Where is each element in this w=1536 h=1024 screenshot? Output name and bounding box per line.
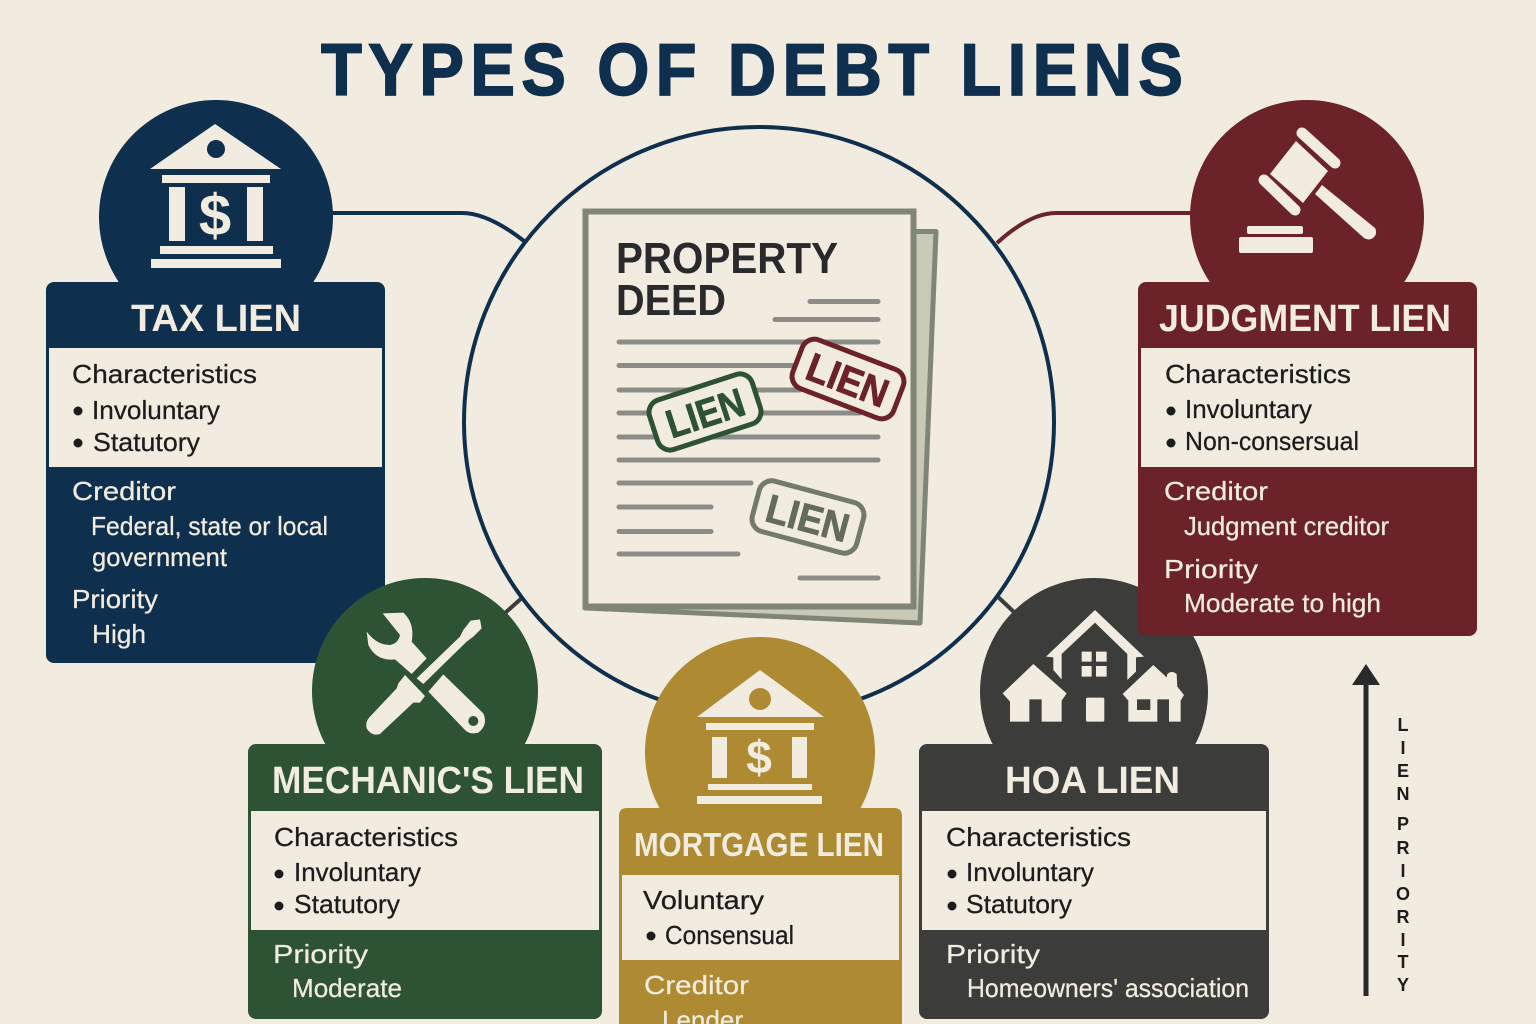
priority: Priority — [946, 939, 1040, 969]
characteristics box: Voluntary — [643, 885, 764, 915]
creditor: government — [92, 542, 228, 572]
panel: mechanic's lien — [248, 578, 602, 1019]
characteristics box — [49, 348, 382, 467]
card heading: JUDGMENT LIEN — [1159, 298, 1451, 340]
label: lien priority: P — [1397, 814, 1409, 834]
icon: bank with dollar sign: $ — [746, 731, 772, 783]
priority: Priority — [72, 584, 158, 614]
characteristics box: Involuntary — [966, 857, 1094, 887]
label: lien priority: T — [1398, 952, 1408, 972]
connector: mechanic's lien to deed — [505, 597, 523, 613]
characteristics box: Characteristics — [72, 359, 257, 389]
card heading: HOA LIEN — [1005, 760, 1180, 802]
card heading: TAX LIEN — [131, 298, 301, 340]
characteristics box — [622, 875, 899, 960]
card — [46, 282, 385, 663]
characteristics box: Involuntary — [1185, 394, 1312, 424]
icon: bank with dollar sign: $ — [199, 183, 231, 248]
deed heading: PROPERTY — [616, 234, 838, 283]
card — [619, 808, 902, 1024]
priority: Priority — [1164, 554, 1258, 584]
panel: judgment lien — [1138, 100, 1477, 636]
label: lien priority: I — [1400, 738, 1406, 758]
text lines — [619, 302, 878, 578]
stamp: green lien: LIEN — [661, 381, 750, 447]
label: lien priority: E — [1397, 761, 1409, 781]
icon: bank with dollar sign — [99, 100, 333, 334]
connector: HOA lien to deed — [997, 596, 1015, 613]
characteristics box: Statutory — [294, 889, 400, 919]
characteristics box: Statutory — [93, 427, 200, 457]
label: lien priority: I — [1400, 930, 1406, 950]
characteristics box — [1141, 348, 1474, 467]
card — [1138, 282, 1477, 636]
priority — [273, 939, 402, 1003]
characteristics box: Non-consersual — [1185, 426, 1359, 456]
title: TYPES OF DEBT LIENS — [321, 29, 1183, 111]
label: lien priority: O — [1396, 884, 1410, 904]
panel: tax lien — [46, 100, 385, 663]
connector: judgment lien to deed — [997, 213, 1194, 243]
label: lien priority — [1396, 715, 1410, 995]
characteristics box: Involuntary — [92, 395, 220, 425]
priority: High — [92, 619, 146, 649]
stamp: gray lien: LIEN — [761, 487, 854, 551]
card — [919, 744, 1269, 1019]
characteristics box: Involuntary — [294, 857, 421, 887]
icon: gavel — [1190, 100, 1424, 334]
label: lien priority: Y — [1397, 975, 1409, 995]
back sheet — [585, 232, 936, 623]
creditor — [72, 476, 328, 572]
creditor: Creditor — [644, 970, 749, 1000]
card heading: MORTGAGE LIEN — [634, 826, 884, 863]
priority — [72, 584, 158, 649]
characteristics box — [922, 811, 1266, 930]
creditor — [644, 970, 749, 1024]
characteristics box: Characteristics — [946, 822, 1131, 852]
creditor — [1164, 476, 1389, 541]
creditor: Creditor — [1164, 476, 1268, 506]
characteristics box: Consensual — [665, 920, 794, 950]
label: lien priority: I — [1400, 861, 1406, 881]
creditor: Judgment creditor — [1184, 511, 1389, 541]
label: lien priority: R — [1396, 907, 1410, 927]
characteristics box — [251, 811, 599, 930]
deed heading — [616, 234, 838, 325]
label: lien priority: R — [1396, 838, 1410, 858]
characteristics box: Characteristics — [274, 822, 458, 852]
priority: Priority — [273, 939, 368, 969]
central circle — [464, 127, 1054, 717]
characteristics box: Characteristics — [1165, 359, 1351, 389]
priority: Moderate to high — [1184, 588, 1381, 618]
stamp: red lien: LIEN — [800, 345, 894, 416]
icon: bank with dollar sign — [645, 637, 875, 867]
deed heading: DEED — [616, 276, 726, 325]
panel: hoa lien — [919, 578, 1269, 1019]
label: lien priority: L — [1398, 715, 1408, 735]
creditor: Creditor — [72, 476, 176, 506]
card — [248, 744, 602, 1019]
characteristics box: Statutory — [966, 889, 1072, 919]
panel: mortgage lien — [619, 637, 902, 1024]
icon: wrench and screwdriver — [312, 578, 538, 804]
label: lien priority: N — [1396, 784, 1410, 804]
arrow: lien priority — [1352, 664, 1380, 996]
priority — [946, 939, 1249, 1003]
card heading: MECHANIC'S LIEN — [272, 760, 584, 802]
icon: houses — [980, 578, 1208, 806]
front sheet — [586, 212, 914, 606]
property deed document — [585, 212, 936, 623]
creditor: Federal, state or local — [91, 511, 328, 541]
priority — [1164, 554, 1381, 618]
priority: Homeowners' association — [967, 973, 1249, 1003]
connector: tax lien to deed — [330, 213, 524, 241]
priority: Moderate — [292, 973, 402, 1003]
